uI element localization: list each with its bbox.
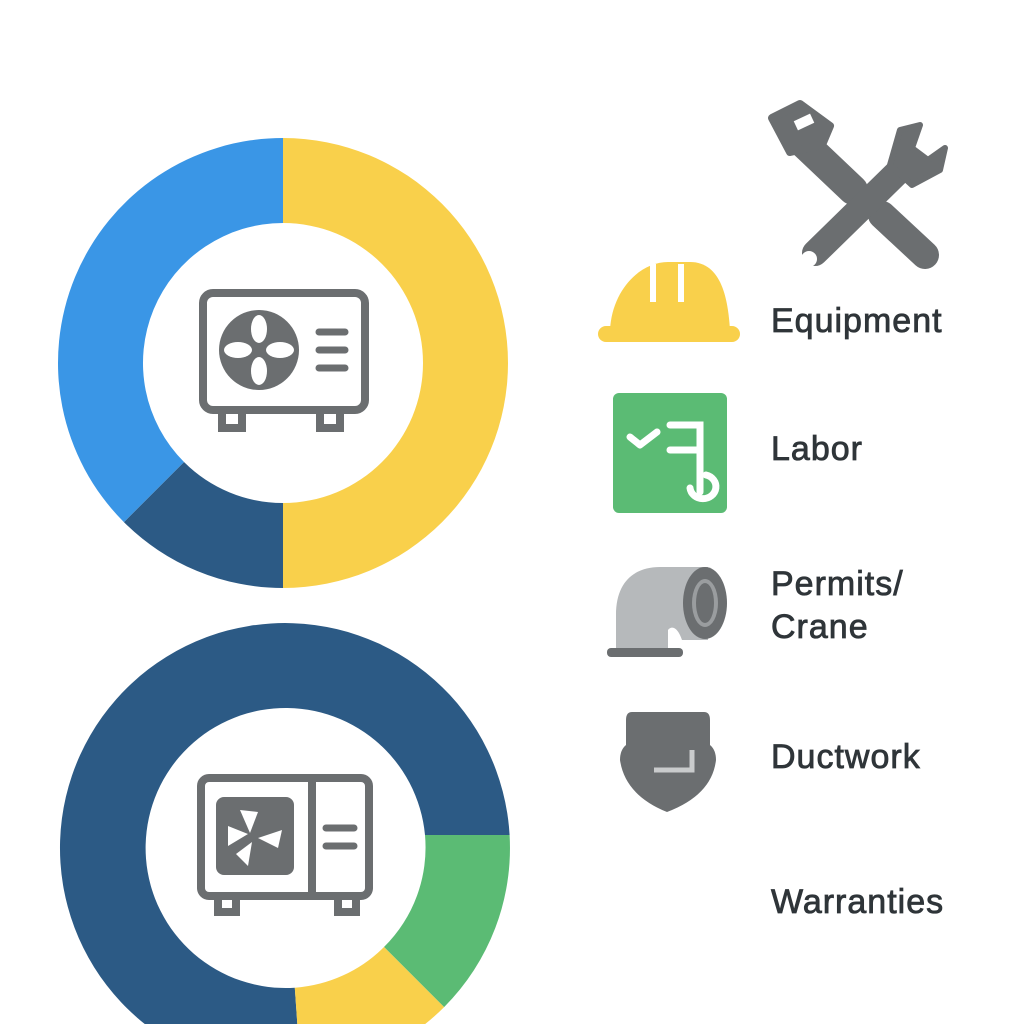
label: Permits/Crane: Permits/ bbox=[771, 565, 904, 603]
icon: pipe elbow bbox=[607, 567, 727, 657]
label: Ductwork: Ductwork bbox=[771, 738, 921, 776]
labels bbox=[771, 302, 944, 921]
label: Equipment: Equipment bbox=[771, 302, 943, 340]
icon: outdoor AC unit top bbox=[203, 293, 365, 428]
label: Warranties: Warranties bbox=[771, 883, 944, 921]
icon: shield bbox=[620, 712, 716, 812]
label: Permits/Crane: Crane bbox=[771, 608, 869, 646]
icon: outdoor AC unit bottom bbox=[201, 778, 369, 912]
icon: green checklist bbox=[613, 393, 727, 513]
icon: hard hat bbox=[598, 262, 740, 342]
icon: crossed wrenches bbox=[772, 104, 945, 267]
donut chart: top bbox=[58, 138, 508, 588]
donut chart: bottom bbox=[60, 623, 510, 1024]
label: Labor: Labor bbox=[771, 430, 863, 468]
